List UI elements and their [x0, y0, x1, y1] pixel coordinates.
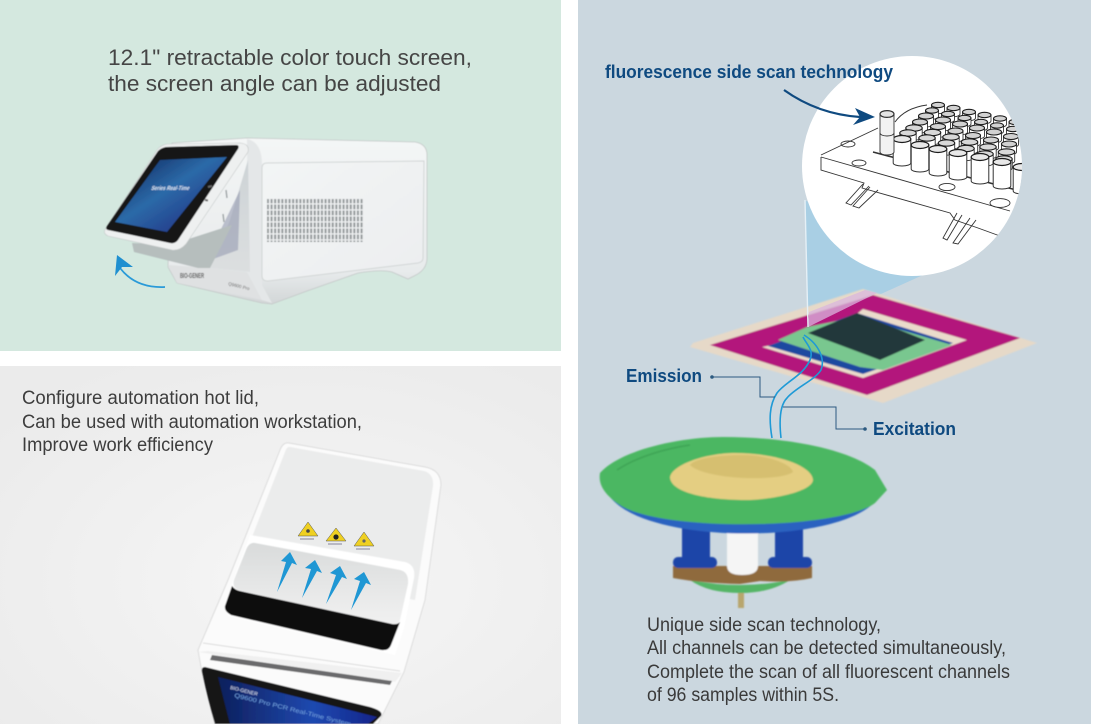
label: Excitation: Excitation — [873, 419, 956, 439]
illustration: instrument top view: Q9600 Pro PCR Real-Time System — [234, 693, 351, 724]
diagram: magnified plate circle — [802, 56, 1031, 276]
label: Emission: Emission — [626, 366, 702, 386]
arrows: lift direction — [277, 552, 371, 610]
arrow: screen adjustment — [115, 255, 165, 287]
text: automation description: Can be used with automation workstation, — [22, 412, 362, 433]
arrow: pointer to tube — [784, 90, 875, 125]
panel: automation hot lid — [0, 366, 561, 724]
illustration: PCR instrument with tilted screen: BIO-GENER — [180, 273, 204, 280]
text: side scan description: of 96 samples within 5S. — [647, 685, 839, 706]
icons: warning labels — [298, 522, 374, 549]
diagram: light beam — [805, 200, 923, 327]
heading: touch screen description — [108, 45, 472, 96]
diagram: beam highlight over board — [808, 290, 877, 327]
text: automation description — [22, 388, 362, 456]
illustration: instrument top view — [198, 443, 441, 724]
illustration: PCR instrument with tilted screen — [104, 138, 427, 304]
illustration: PCR instrument with tilted screen: Series Real-Time — [150, 185, 191, 192]
diagram: optical fibers — [770, 335, 822, 438]
diagram: optical disc assembly — [600, 437, 887, 608]
illustration: instrument top view: BIO-GENER — [230, 685, 259, 698]
diagram: scan module board — [690, 289, 1037, 403]
text: automation description: Configure automation hot lid, — [22, 388, 259, 409]
illustration: PCR instrument with tilted screen: Q9600 Pro — [228, 281, 251, 291]
text: side scan description: Complete the scan of all fluorescent channels — [647, 662, 1010, 683]
icon: air vent grille — [267, 199, 364, 242]
heading: touch screen description: the screen angle can be adjusted — [108, 71, 441, 96]
heading: fluorescence side scan technology: fluorescence side scan technology — [605, 62, 893, 82]
label: Excitation — [783, 407, 956, 439]
panel: touch screen — [0, 0, 561, 351]
label: Emission — [626, 366, 775, 397]
heading: touch screen description: 12.1" retractable color touch screen, — [108, 45, 472, 70]
panel: fluorescence side scan — [578, 0, 1091, 724]
text: side scan description — [647, 615, 1010, 706]
text: automation description: Improve work efficiency — [22, 435, 213, 456]
text: side scan description: All channels can be detected simultaneously, — [647, 638, 1006, 659]
text: side scan description: Unique side scan technology, — [647, 615, 881, 636]
